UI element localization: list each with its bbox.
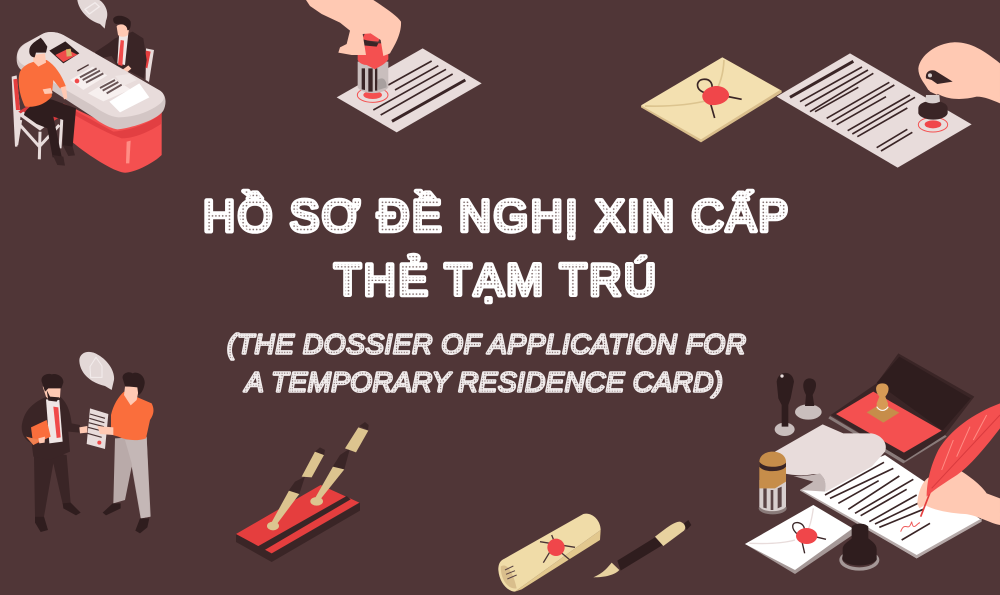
paper sheet: [775, 424, 886, 492]
right pen: [310, 422, 369, 506]
hand: [306, 0, 401, 56]
paper shadow: [793, 473, 826, 492]
wooden stamp on pad: [867, 383, 899, 423]
large dark stamp: [775, 373, 795, 436]
title line 1: HỒ SƠ ĐỀ NGHỊ XIN CẤP: [203, 191, 788, 241]
document text lines: [373, 61, 465, 121]
wooden cylinder stamp: [759, 452, 787, 514]
ink pad: [828, 353, 974, 463]
ink bottle: [839, 524, 879, 571]
subtitle line 2: A TEMPORARY RESIDENCE CARD): [243, 366, 723, 398]
stamp: [918, 95, 948, 120]
agent: [83, 16, 147, 79]
scroll end: [501, 566, 517, 589]
hand: [917, 467, 1000, 525]
small dark stamp: [795, 378, 822, 420]
papers on counter: [70, 65, 149, 112]
subtitle line 1: (THE DOSSIER OF APPLICATION FOR: [227, 328, 746, 360]
title line 2: THẺ TẠM TRÚ: [334, 255, 656, 305]
scroll shade: [515, 530, 601, 592]
stand base: [236, 485, 360, 562]
subtitle line 2: A TEMPORARY RESIDENCE CARD): [243, 366, 723, 398]
left pen: [267, 447, 325, 530]
speech bubble: [79, 352, 114, 390]
stamp body: [358, 33, 388, 99]
scroll end marks: [505, 566, 517, 579]
signature: [901, 522, 920, 532]
document text lines: [790, 61, 915, 151]
right chair: [144, 48, 154, 82]
seal: [540, 535, 575, 563]
handle neck: [925, 83, 937, 95]
quill feather: [921, 403, 1000, 517]
counter highlight: [126, 141, 131, 163]
illustration: service counter with agent and customer: [12, 0, 166, 173]
envelope body: [641, 57, 782, 142]
stamp handle: [926, 70, 953, 84]
illustration: two people exchanging a document: [22, 352, 153, 533]
counter base: [63, 103, 162, 173]
hand: [918, 42, 1000, 103]
woman: [97, 372, 153, 533]
illustration: pen stand: [236, 422, 369, 562]
man in suit: [22, 374, 87, 532]
illustration: hand stamping a document: [306, 0, 482, 132]
counter top edge: [17, 32, 166, 129]
ink pad on counter: [49, 41, 79, 63]
counter top surface: [17, 32, 164, 117]
customer: [19, 38, 76, 166]
illustration: fountain pen: [593, 520, 691, 577]
illustration: sealed envelope: [641, 57, 782, 142]
letter text lines: [825, 462, 930, 540]
small letter with seal: [745, 505, 853, 574]
speech bubble: [77, 0, 107, 29]
document: [777, 53, 972, 168]
title line 2: THẺ TẠM TRÚ: [334, 255, 656, 305]
envelope flap folds: [645, 60, 724, 106]
left chair: [12, 75, 63, 159]
letter on desk: [800, 455, 982, 558]
document held: [87, 408, 108, 449]
stamp imprint: [357, 88, 388, 102]
title line 1: HỒ SƠ ĐỀ NGHỊ XIN CẤP: [203, 191, 788, 241]
wax seal: [698, 79, 742, 118]
stamp imprint: [918, 117, 948, 132]
illustration: scroll with wax seal: [498, 514, 601, 592]
counter shadow band: [67, 106, 162, 138]
document: [337, 48, 482, 132]
illustration: stamps, ink pad, letter and quill: [745, 353, 1000, 574]
illustration: document with stamp and hand: [777, 42, 1000, 168]
subtitle line 1: (THE DOSSIER OF APPLICATION FOR: [227, 328, 746, 360]
